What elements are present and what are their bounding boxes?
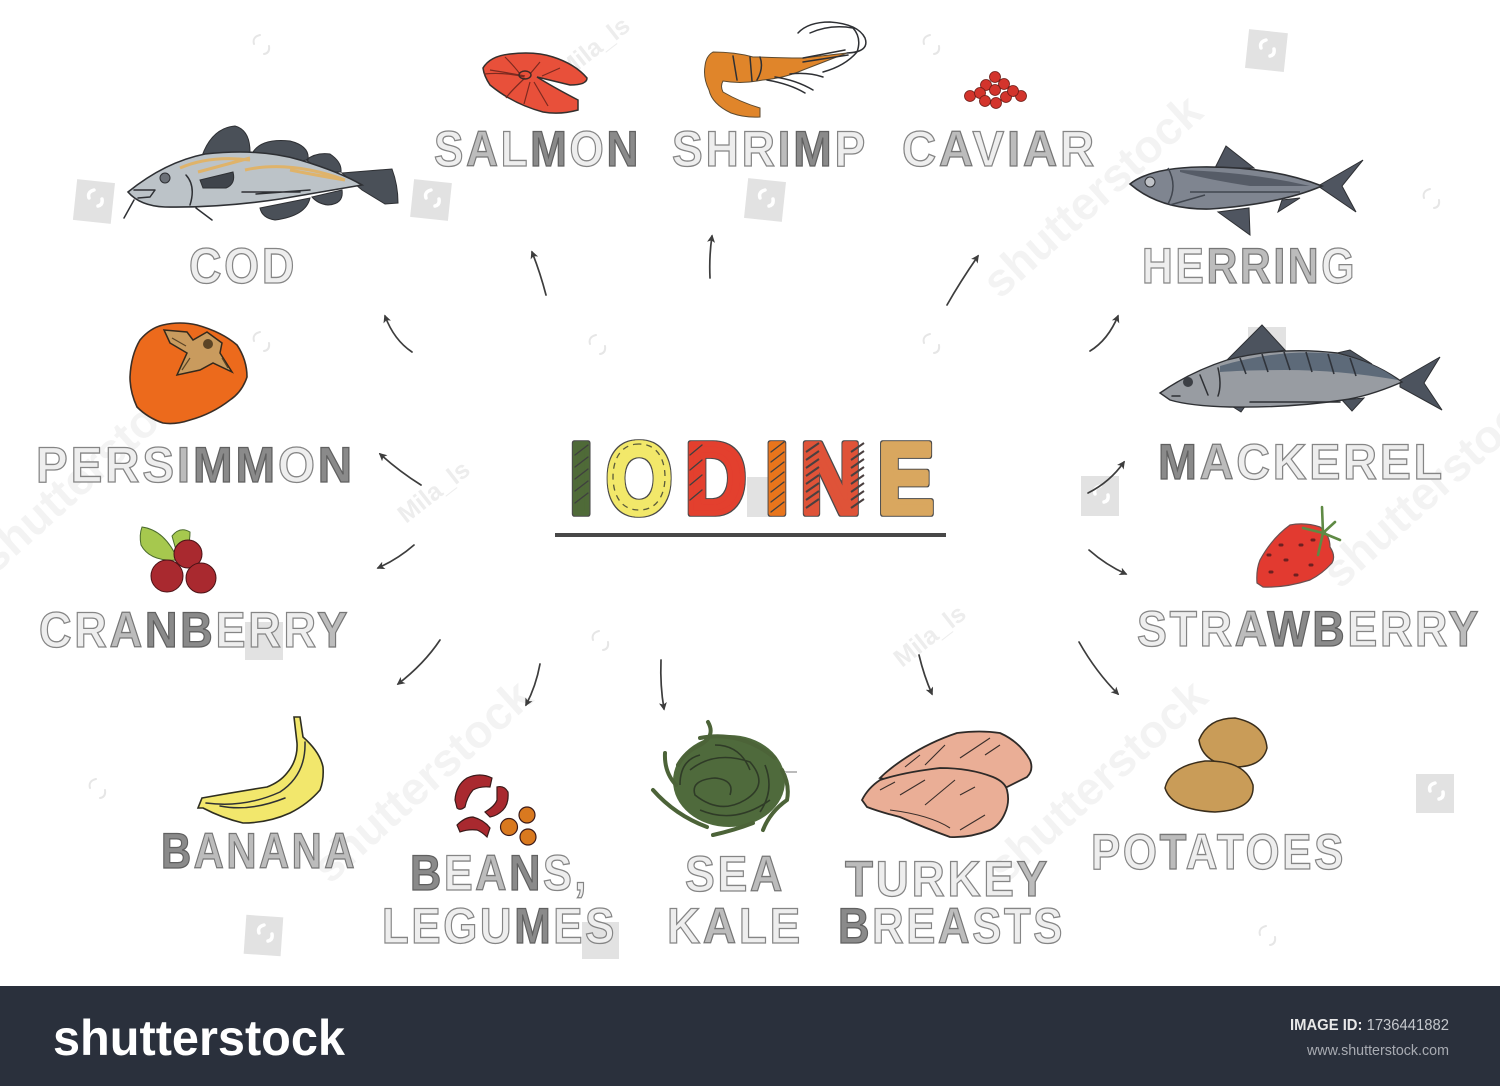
label: herring: HERRING [1142,238,1357,294]
label: turkey breasts: BREASTS [838,898,1065,954]
label: persimmon: PERSIMMON [36,437,355,493]
footer logo: shutterstock [53,1010,345,1066]
icon: potatoes [1165,718,1267,812]
label: sea kale: SEA [685,846,785,902]
watermarks: shutterstock [972,84,1212,307]
label: shrimp: SHRIMP [672,121,868,177]
icon: cranberry [140,527,216,593]
watermarks: Mila_ls [888,599,971,673]
label: turkey breasts: TURKEY [845,851,1050,907]
title: I [570,422,593,535]
icon: salmon [483,53,587,113]
icon: cod [124,126,398,220]
label: sea kale [667,846,803,954]
footer image id: IMAGE ID: 1736441882 [1290,1017,1449,1034]
icon: mackerel [1160,325,1442,412]
icon: banana [198,717,323,823]
label: banana: BANANA [161,823,357,879]
title [570,422,934,535]
watermarks: Mila_ls [392,455,475,529]
label: salmon: SALMON [434,121,641,177]
label: potatoes: POTATOES [1091,824,1346,880]
label: beans, legumes: LEGUMES [382,898,617,954]
label: cranberry: CRANBERRY [39,602,350,658]
title hatching [575,442,784,512]
label: beans, legumes [382,845,617,954]
icon: beans [455,775,536,845]
title: O [606,422,672,535]
icon: herring [1130,146,1363,235]
label: beans, legumes: BEANS, [410,845,589,901]
footer bar [0,986,1500,1086]
icon: sea kale [653,722,797,835]
watermarks: shutterstock [302,669,542,892]
title: N [801,422,861,535]
label: turkey breasts [838,851,1065,954]
icon: caviar [964,72,1026,108]
footer url: www.shutterstock.com [1306,1043,1449,1059]
icon: turkey breasts [862,732,1031,837]
title: D [685,422,746,535]
icon: shrimp [704,22,866,117]
icon: strawberry [1257,507,1340,587]
label: strawberry: STRAWBERRY [1137,601,1481,657]
title underline [555,533,946,537]
title: I [765,422,789,535]
watermarks: Mila_ls [552,11,635,85]
title: E [878,422,934,535]
label: sea kale: KALE [667,898,803,954]
label: cod: COD [189,238,297,294]
arrows [378,236,1126,709]
icon: persimmon [130,323,247,424]
label: caviar: CAVIAR [902,121,1097,177]
watermarks: shutterstock [977,669,1217,892]
label: mackerel: MACKEREL [1158,434,1445,490]
